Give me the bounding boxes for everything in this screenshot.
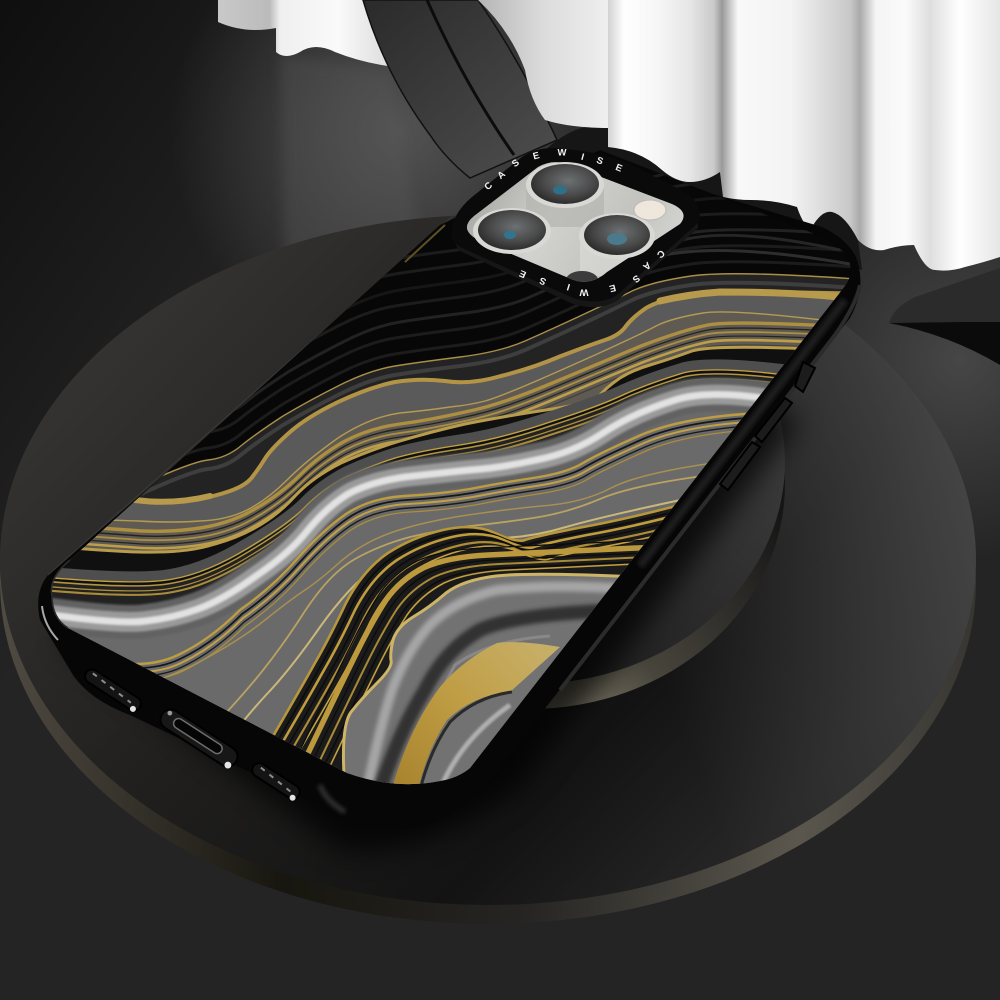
dense gold and black group — [272, 505, 674, 784]
small pedestal — [275, 240, 785, 709]
band: upper dark with thin gold — [139, 273, 850, 499]
camera ring — [452, 148, 700, 301]
bottom port: right speaker — [249, 760, 302, 802]
lens left — [473, 208, 551, 254]
band: dark with gold edge — [54, 346, 798, 586]
flash — [634, 200, 666, 220]
large round platform — [0, 215, 976, 924]
lens right — [579, 213, 655, 259]
floor shadow under curtain — [540, 126, 862, 270]
phone case body — [38, 160, 860, 829]
phone shadow — [60, 280, 800, 851]
band: wide gold — [70, 290, 841, 560]
grey ring band — [342, 572, 620, 784]
gold fine lines — [30, 370, 830, 595]
curtain left — [218, 0, 392, 66]
curved stand behind phone — [363, 0, 557, 178]
band: grey with gold line — [70, 311, 820, 560]
bottom port: left speaker — [82, 667, 144, 714]
camera ring side — [453, 215, 698, 307]
white band — [52, 376, 771, 770]
grey strip — [30, 365, 830, 577]
bottom port: charging — [156, 706, 241, 771]
wide gold highlights — [135, 292, 838, 502]
curtain right — [478, 0, 1000, 271]
lower grey streaks — [420, 692, 512, 790]
marble pattern screen — [52, 150, 850, 784]
black streaks upper area — [186, 174, 850, 456]
screen rim highlight — [51, 560, 70, 628]
gold agate band — [393, 642, 560, 790]
gold line group — [86, 321, 816, 550]
brand text bottom: CASEWISE — [518, 247, 667, 298]
camera window — [466, 162, 684, 282]
right stand — [889, 268, 1000, 365]
band: fine gold group — [52, 373, 774, 605]
camera module — [450, 148, 700, 307]
lens top — [526, 162, 604, 208]
grey lower field with gold lines — [134, 412, 746, 770]
side buttons — [720, 362, 815, 490]
brand text top: CASEWISE — [482, 148, 624, 193]
